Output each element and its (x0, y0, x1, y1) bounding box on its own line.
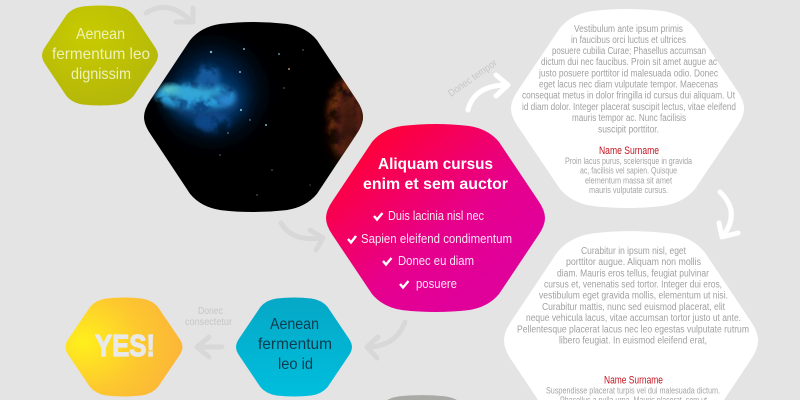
pink heading (363, 156, 508, 193)
panel body text: posuere cubilia Curae; Phasellus accumsan (552, 46, 706, 57)
teal text: Aenean (270, 316, 319, 333)
hexagon: pink (326, 124, 545, 312)
checklist: posuere (416, 277, 457, 291)
label: donec consectetur: consectetur (185, 317, 233, 328)
arrow: image to pink (281, 223, 323, 250)
panel body text: porttitor augue. Aliquam non mollis (566, 257, 701, 268)
olive text (52, 26, 150, 83)
panel author: Name Surname (599, 145, 659, 157)
nebula (155, 52, 362, 165)
panel author: Proin lacus purus, scelerisque in gravida (565, 156, 692, 166)
hexagon: yes (66, 298, 182, 396)
checklist (348, 209, 512, 291)
panel body text: libero feugiat. In euismod eleifend erat, (559, 335, 707, 346)
panel author: elementum massa sit amet (585, 175, 672, 185)
panel author: mauris vulputate cursus. (589, 185, 668, 195)
panel body text: Pellentesque placerat lacus nec leo egestas vulputate rutrum (517, 324, 749, 335)
arrow: olive to image (146, 7, 193, 22)
panel body text: eget lacus nec diam vulputate tempor. Maecenas (539, 79, 718, 90)
panel author (546, 374, 720, 400)
arrow: white panel to white panel (719, 192, 738, 237)
olive text: Aenean (76, 26, 125, 43)
checklist: Sapien eleifend condimentum (361, 232, 512, 246)
stars (210, 48, 311, 196)
hexagon: space image (144, 21, 364, 213)
panel body text: diam. Mauris eros tellus, feugiat pulvinar (557, 268, 710, 279)
panel body text: Curabitur in ipsum nisl, eget (581, 246, 686, 257)
teal text (258, 316, 332, 373)
yes label: YES! (95, 328, 155, 363)
panel author (565, 145, 692, 195)
hexagon: white text panel top (511, 9, 744, 208)
hexagon: grey partial (347, 395, 497, 400)
panel body text: dictum dui nec faucibus. Proin sit amet augue ac (541, 57, 717, 68)
panel body text: cursus et, venenatis sed tortor. Integer dui eros, (544, 279, 722, 290)
panel author: Name Surname (604, 374, 663, 386)
hexagon: olive (42, 6, 158, 105)
hexagon: white text panel bottom (504, 231, 758, 400)
panel author: Suspendisse placerat turpis vel dui malesuada dictum. (546, 385, 720, 395)
arrow: pink to white panel (468, 75, 508, 110)
panel body text: neque vehicula lacus, vitae accumsan tortor justo ut ante. (526, 313, 741, 324)
pink heading: Aliquam cursus (378, 156, 493, 173)
pink heading: enim et sem auctor (363, 176, 508, 193)
arrow: teal to yes (197, 337, 222, 357)
checklist: Donec eu diam (398, 254, 474, 268)
panel body text: justo posuere porttitor id malesuada odio. Donec (538, 68, 718, 79)
panel body text: consequat metus in dolor fringilla id cursus dui aliquam. Ut (522, 91, 735, 102)
label: donec consectetur: Donec (198, 306, 223, 317)
panel body text: id diam dolor. Integer placerat suscipit lectus, vitae eleifend (522, 102, 736, 113)
panel body text (517, 246, 749, 346)
panel body text: vestibulum eget gravida mollis, elementum ut nisi. (539, 291, 728, 302)
panel body text: Curabitur mattis, nunc sed euismod placerat, elit (542, 302, 725, 313)
arrow: pink to teal (367, 322, 405, 358)
panel body text: mauris tempor ac. Nunc facilisis (572, 113, 686, 124)
olive text: fermentum leo (52, 46, 150, 63)
panel body text: suscipit porttitor. (598, 124, 659, 135)
label: donec tempor: Donec tempor (446, 57, 500, 99)
teal text: fermentum (258, 336, 332, 353)
panel author: ac, facilisis vel sapien. Quisque (580, 166, 677, 176)
label: donec consectetur (185, 306, 233, 328)
hexagon: teal (236, 298, 352, 396)
checklist: Duis lacinia nisl nec (388, 209, 484, 223)
panel body text: Vestibulum ante ipsum primis (574, 24, 683, 35)
teal text: leo id (278, 356, 313, 373)
panel body text (522, 24, 736, 135)
panel body text: in faucibus orci luctus et ultrices (571, 35, 686, 46)
olive text: dignissim (71, 66, 131, 83)
